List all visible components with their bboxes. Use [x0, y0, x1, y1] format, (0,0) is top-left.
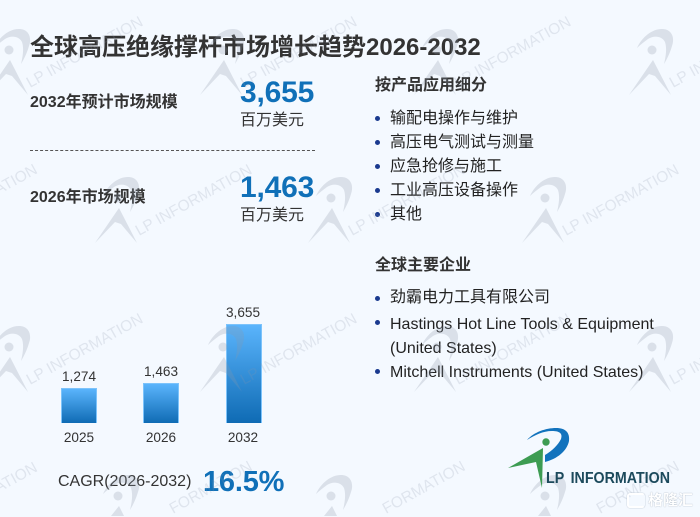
list: product application segments — [375, 109, 534, 223]
heading: segments: 按产品应用细分 — [375, 77, 487, 94]
list: product application segments: 高压电气测试与测量 — [390, 134, 534, 151]
list: key companies — [375, 288, 654, 381]
unit: 2026 market size: 百万美元 — [240, 207, 304, 224]
year label 2026: 2026 — [146, 430, 176, 445]
watermark pattern: LP INFORMATION — [238, 13, 360, 91]
list: product application segments: 输配电操作与维护 — [390, 110, 518, 127]
heading: key companies: 全球主要企业 — [375, 257, 471, 274]
unit: 2032 market size: 百万美元 — [240, 112, 304, 129]
CAGR label: CAGR(2026-2032) — [58, 473, 191, 490]
watermark pattern: LP INFORMATION — [452, 310, 574, 388]
list: key companies: Hastings Hot Line Tools & Equipment — [390, 316, 654, 333]
watermark pattern: FORMATION — [594, 458, 682, 517]
watermark pattern: LP INFORMATION — [24, 13, 146, 91]
list: key companies: 劲霸电力工具有限公司 — [390, 289, 550, 306]
bar: 2026 — [143, 383, 179, 423]
list: product application segments: 其他 — [390, 206, 422, 223]
watermark pattern: LP INFORMATION — [452, 13, 574, 91]
bar: 2025 — [61, 388, 97, 423]
label: 2026 market size: 2026年市场规模 — [30, 189, 146, 206]
watermark pattern: LP INFORMATION — [346, 161, 468, 239]
list: product application segments: 应急抢修与施工 — [390, 158, 502, 175]
value label 2025: 1,274 — [62, 369, 96, 384]
badge: Gelonghui watermark — [626, 492, 693, 509]
value label 2026: 1,463 — [144, 364, 178, 379]
bar chart — [61, 305, 262, 445]
list: key companies: (United States) — [390, 340, 497, 357]
logo: LP Information: LP INFORMATION — [546, 470, 670, 487]
watermark pattern: LP INFORMATION — [238, 310, 360, 388]
watermark pattern: LP INFORMATION — [24, 310, 146, 388]
badge: Gelonghui watermark: 格隆汇 — [648, 492, 693, 509]
list: key companies: Mitchell Instruments (United States) — [390, 364, 643, 381]
watermark pattern: FORMATION — [167, 458, 255, 517]
watermark pattern: LP INFORMATION — [560, 161, 682, 239]
label: 2032 market size: 2032年预计市场规模 — [30, 94, 178, 111]
bar: 2032 — [226, 324, 262, 423]
year label 2032: 2032 — [228, 430, 258, 445]
value: 2032 market size: 3,655 — [240, 76, 314, 109]
watermark pattern: FORMATION — [380, 458, 468, 517]
watermark pattern: LP INFORMATION — [133, 161, 255, 239]
value label 2032: 3,655 — [226, 305, 260, 320]
year label 2025: 2025 — [64, 430, 94, 445]
CAGR value: 16.5% — [203, 466, 284, 498]
list: product application segments: 工业高压设备操作 — [390, 182, 518, 199]
value: 2026 market size: 1,463 — [240, 171, 314, 204]
title: 全球高压绝缘撑杆市场增长趋势2026-2032 — [30, 34, 481, 61]
